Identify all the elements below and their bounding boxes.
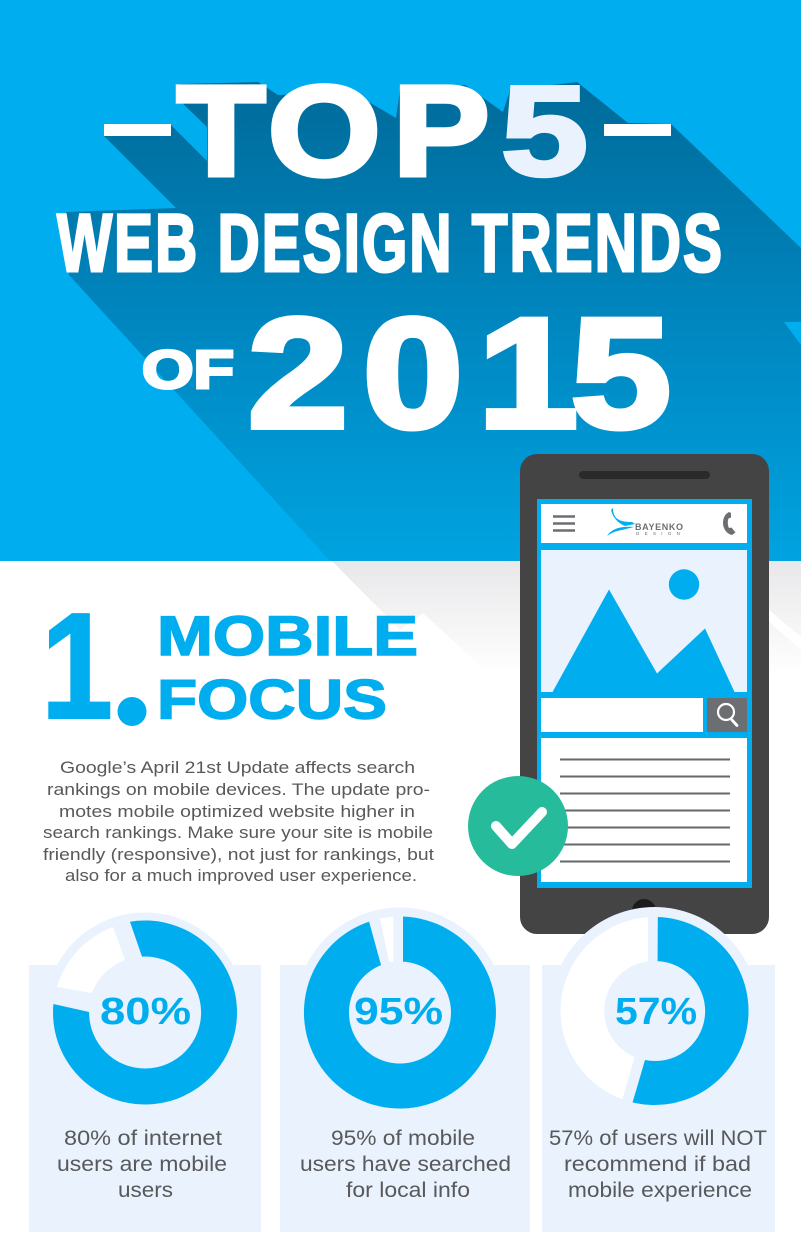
stat caption: 95% of mobile [331, 1127, 475, 1150]
icon: green check badge [468, 776, 568, 876]
icon: telephone [723, 512, 736, 535]
sun [669, 569, 699, 600]
heading word focus: FOCUS [157, 668, 387, 730]
panel: stat 80 percent [29, 912, 261, 1232]
stat caption: users [118, 1179, 173, 1202]
donut value 95 percent [304, 917, 496, 1109]
fading grey shadow on white area [332, 561, 801, 675]
stat caption: mobile experience [568, 1179, 752, 1202]
title year 2015: 2015 [248, 286, 671, 460]
stat value: 57% [615, 991, 697, 1033]
highlight streak right of phone [769, 610, 801, 650]
stat caption: users have searched [300, 1153, 511, 1176]
stat caption: recommend if bad [564, 1153, 751, 1176]
stat caption: 80% of internet [64, 1127, 222, 1150]
numeral 1: 1 [41, 581, 113, 750]
stat caption [549, 1127, 767, 1202]
donut remainder 43 percent [561, 917, 648, 1099]
title dash right [604, 124, 671, 136]
donut value 80 percent [53, 920, 237, 1104]
body paragraph: friendly (responsive), not just for rankings, but [43, 845, 434, 864]
icon: magnifier [732, 720, 737, 726]
title word OF: OF [142, 340, 234, 400]
phone screen [537, 499, 752, 888]
title [57, 59, 724, 460]
long shadow behind title [66, 82, 801, 561]
header background [0, 0, 801, 561]
body paragraph: rankings on mobile devices. The update pro- [47, 780, 430, 799]
panel: stat 95 percent [280, 908, 530, 1232]
phone body [520, 454, 769, 934]
search field [541, 698, 703, 732]
donut remainder 5 percent [380, 917, 394, 962]
panel: stat 57 percent [542, 907, 775, 1232]
screen text block [541, 738, 747, 882]
stat value: 95% [354, 991, 443, 1033]
body paragraph: search rankings. Make sure your site is mobile [43, 823, 433, 842]
logo sub word: DESIGN [636, 531, 680, 536]
donut halo [295, 908, 505, 1118]
phone home button [632, 899, 656, 923]
title line web design trends: WEB DESIGN TRENDS [57, 198, 724, 289]
icon: hamburger menu [553, 516, 575, 530]
section heading [41, 581, 418, 750]
phone speaker [579, 471, 710, 479]
stat caption [57, 1127, 227, 1202]
body paragraph: also for a much improved user experience. [65, 866, 417, 885]
body paragraph [43, 758, 434, 885]
donut halo [45, 912, 245, 1112]
title numeral 5: 5 [501, 60, 588, 203]
stat caption [300, 1127, 511, 1202]
title word TOP: TOP [177, 59, 489, 202]
stat value: 80% [100, 991, 191, 1033]
mountains [552, 590, 735, 693]
donut remainder 20 percent [57, 927, 125, 993]
donut value 57 percent [633, 917, 749, 1105]
body paragraph: Google’s April 21st Update affects search [60, 758, 415, 777]
body paragraph: motes mobile optimized website higher in [59, 802, 415, 821]
search button [707, 698, 747, 732]
stat caption: users are mobile [57, 1153, 227, 1176]
screen header bar [541, 504, 747, 543]
logo word: BAYENKO [635, 522, 683, 532]
title dash left [104, 124, 171, 136]
logo [607, 508, 683, 536]
phone [520, 454, 769, 934]
logo swoosh [607, 508, 635, 536]
stat caption: for local info [346, 1179, 470, 1202]
numeral period [118, 697, 146, 726]
heading word mobile: MOBILE [157, 604, 418, 667]
donut halo [550, 907, 758, 1115]
screen hero image [541, 550, 747, 693]
stat caption: 57% of users will NOT [549, 1127, 767, 1150]
